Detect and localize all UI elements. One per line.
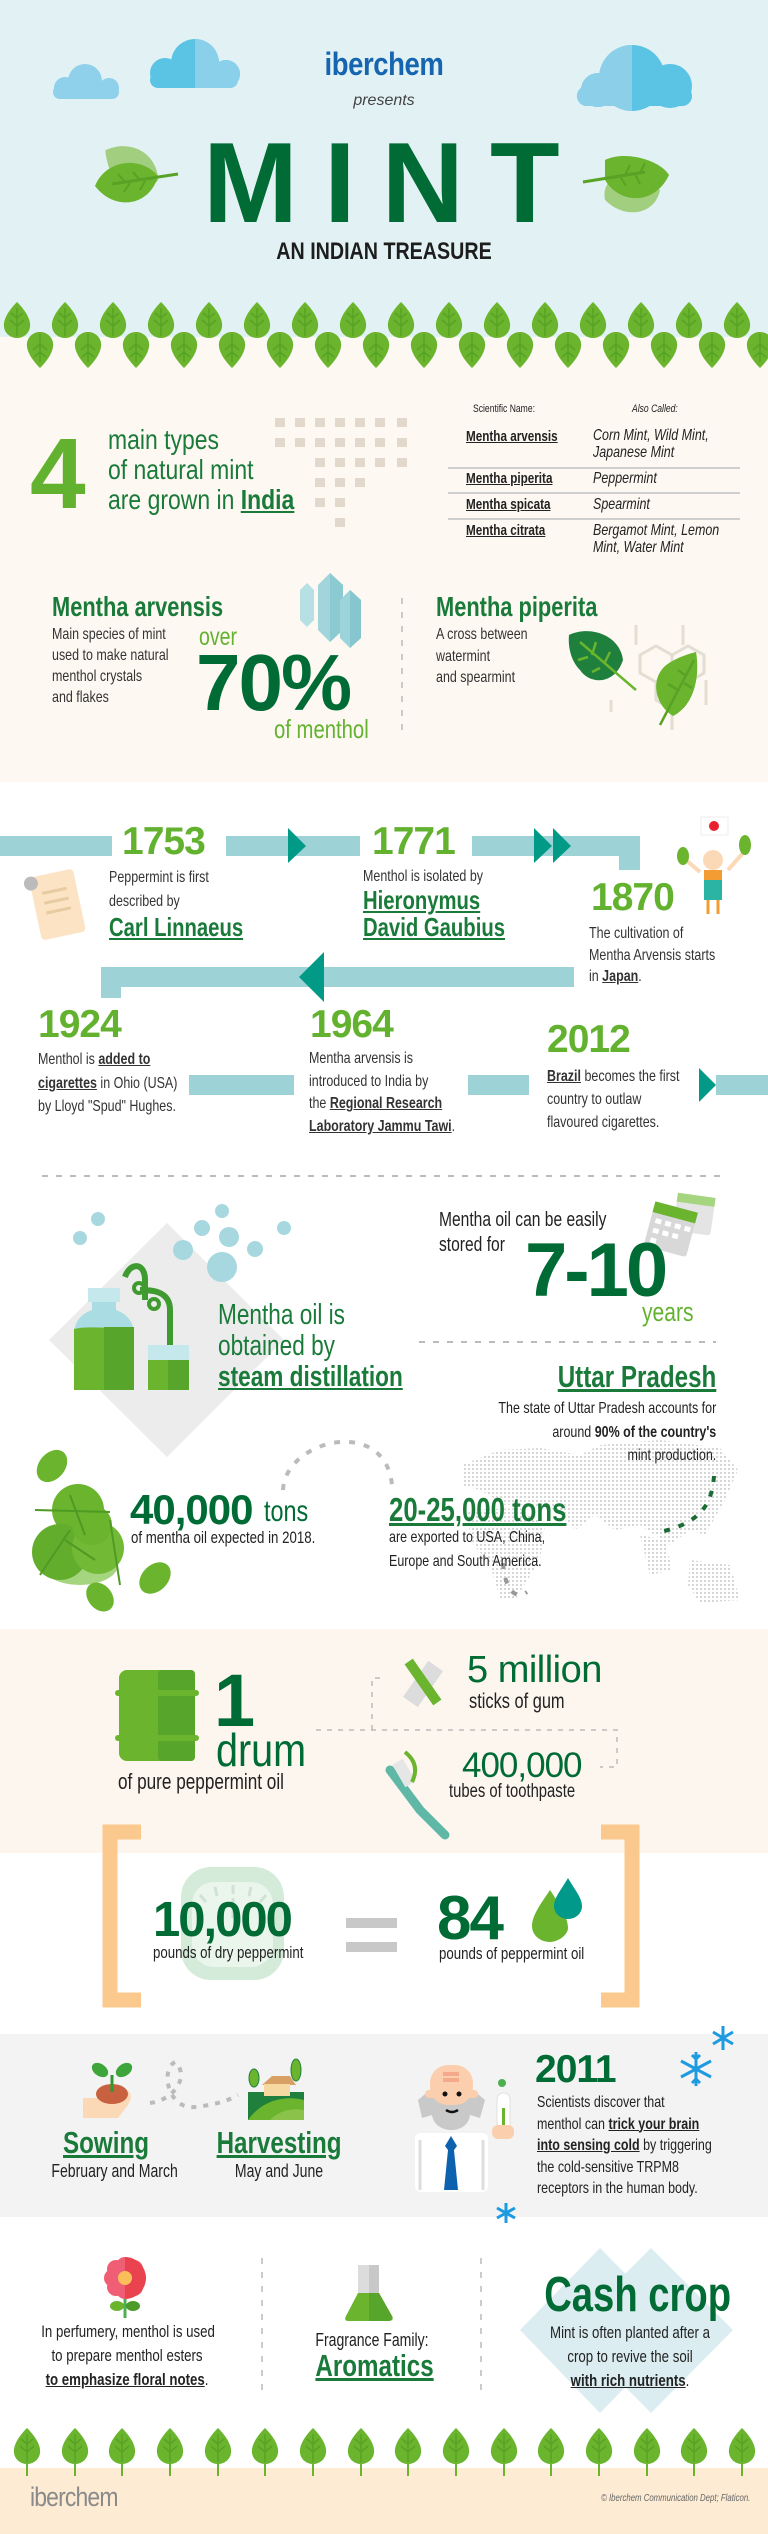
timeline 1753: described by <box>109 893 180 910</box>
timeline 1753: Peppermint is first <box>109 869 209 886</box>
text: fragrance family aromatics: Fragrance Family: <box>315 2330 429 2350</box>
text: main types: main types <box>108 424 219 455</box>
stat: 400,000 tubes: tubes of toothpaste <box>449 1781 575 1802</box>
text: perfumery <box>41 2322 215 2389</box>
icon: seedling in hand <box>83 2060 135 2118</box>
text: steam distillation <box>218 1299 403 1393</box>
timeline 2012: Brazil becomes the first <box>547 1068 679 1085</box>
text: fragrance family aromatics: Aromatics <box>315 2348 434 2383</box>
text: perfumery: In perfumery, menthol is used <box>41 2322 215 2341</box>
text: Uttar Pradesh: The state of Uttar Pradesh accounts for <box>498 1400 716 1417</box>
icon: drum <box>115 1670 199 1761</box>
text: harvesting: May and June <box>235 2161 323 2181</box>
table header: Scientific Name: <box>473 403 535 415</box>
text: steam distillation: obtained by <box>218 1330 335 1362</box>
dotted world map <box>462 1440 740 1603</box>
stat: 10,000 pounds: pounds of dry peppermint <box>153 1943 303 1962</box>
timeline 1964: Mentha arvensis is <box>309 1050 413 1067</box>
timeline: middle bar with left arrow <box>101 952 574 1002</box>
icon: field with house <box>248 2059 304 2120</box>
body <box>436 626 528 686</box>
timeline 1753: Carl Linnaeus <box>109 912 243 942</box>
dividers <box>262 2258 481 2393</box>
stat: 1 drum: drum <box>216 1724 306 1776</box>
stat: 84 pounds: pounds of peppermint oil <box>439 1944 584 1963</box>
table: mint species <box>466 403 719 556</box>
timeline: bottom bar segments <box>189 1068 768 1102</box>
stat: 5 million sticks of gum <box>467 1649 602 1713</box>
text: cash crop <box>544 2268 731 2390</box>
text: cash crop: Cash crop <box>544 2268 731 2322</box>
heading: Mentha arvensis <box>52 591 223 622</box>
body: and spearmint <box>436 669 515 686</box>
logo: iberchem: iberchem <box>325 46 443 82</box>
text: 2011 discovery: 2011 <box>535 2048 616 2091</box>
body: used to make natural <box>52 647 169 664</box>
cloud right <box>577 45 692 111</box>
icons: snowflakes <box>497 2026 733 2223</box>
stat: 1 drum <box>118 1659 306 1794</box>
text: 2011 discovery: receptors in the human body. <box>537 2180 698 2197</box>
stat: 20-25,000 tons exported: are exported to USA, China, <box>389 1529 545 1546</box>
equals sign <box>346 1918 397 1952</box>
footer credit: © Iberchem Communication Dept; Flaticon. <box>601 2493 750 2504</box>
timeline 2012: flavoured cigarettes. <box>547 1114 659 1131</box>
text: main types <box>108 424 294 515</box>
leaf row bottom <box>14 2428 755 2464</box>
icon: scroll <box>23 868 86 942</box>
timeline 1870: in Japan. <box>589 968 642 985</box>
timeline 1924 <box>38 1003 177 1115</box>
timeline 1964: Laboratory Jammu Tawi. <box>309 1118 455 1135</box>
dashed route on map <box>660 1476 714 1532</box>
stat: 20-25,000 tons exported <box>389 1491 566 1570</box>
dashed line right <box>419 1341 716 1343</box>
big number 4: 4 <box>30 418 86 530</box>
text: sowing: Sowing <box>63 2125 149 2160</box>
icon: calendars <box>644 1193 716 1257</box>
text: perfumery: to emphasize floral notes. <box>46 2370 208 2389</box>
subtitle: AN INDIAN TREASURE <box>276 238 492 265</box>
icon: bubbles <box>73 1204 291 1282</box>
timeline 1924: cigarettes in Ohio (USA) <box>38 1074 177 1092</box>
timeline 1964: introduced to India by <box>309 1073 428 1090</box>
timeline 1753 <box>109 820 244 942</box>
icon: flask <box>345 2265 393 2321</box>
body: Main species of mint <box>52 626 166 643</box>
timeline 1771: David Gaubius <box>363 912 505 942</box>
table: mint species: Peppermint <box>593 470 657 487</box>
stat: 40,000 tons: of mentha oil expected in 2018. <box>131 1528 315 1547</box>
text: cash crop: with rich nutrients. <box>571 2371 689 2390</box>
cream band <box>0 1629 768 1853</box>
icon: flower <box>104 2257 146 2318</box>
body <box>52 626 169 706</box>
timeline 1753: 1753 <box>122 820 205 863</box>
footer logo: iberchem <box>30 2482 118 2512</box>
icon: leaves left of title <box>95 139 178 202</box>
dashed line <box>42 1175 723 1177</box>
text: main types: are grown in India <box>108 484 294 515</box>
text: Uttar Pradesh: mint production. <box>627 1447 716 1464</box>
icon: leaves right of title <box>583 156 669 212</box>
timeline 1964 <box>309 1003 455 1135</box>
text: Uttar Pradesh <box>498 1359 716 1464</box>
timeline 1964: 1964 <box>310 1003 393 1046</box>
text: 2011 discovery <box>535 2048 712 2197</box>
timeline 2012: 2012 <box>547 1018 630 1061</box>
stat: 1 drum: 1 <box>214 1659 255 1742</box>
text: stored 7-10 years <box>439 1209 694 1327</box>
stat: 20-25,000 tons exported: 20-25,000 tons <box>389 1491 566 1528</box>
body: and flakes <box>52 689 109 706</box>
text: fragrance family aromatics <box>315 2330 434 2383</box>
icon: person with japan flag <box>677 817 751 914</box>
stat: 84 pounds <box>437 1884 584 1963</box>
timeline 1870: The cultivation of <box>589 925 683 942</box>
timeline 1870 <box>589 876 715 985</box>
timeline 1924: 1924 <box>38 1003 121 1046</box>
text: main types: of natural mint <box>108 454 253 485</box>
dashed connectors <box>316 1678 617 1767</box>
table: mint species: Japanese Mint <box>593 444 674 461</box>
70%: 70% <box>196 638 350 727</box>
leaf row top <box>4 302 768 368</box>
timeline 2012 <box>547 1018 680 1131</box>
panel: Mentha arvensis <box>52 591 369 744</box>
table: mint species: Mentha citrata <box>466 522 545 539</box>
table: mint species: Also Called: <box>632 403 678 415</box>
of menthol: of menthol <box>274 714 369 744</box>
over: over <box>199 623 237 651</box>
text: 2011 discovery: Scientists discover that <box>537 2094 665 2111</box>
timeline 1870: 1870 <box>591 876 674 919</box>
dot grid decoration <box>275 418 407 527</box>
text: stored 7-10 years: Mentha oil can be easily <box>439 1209 606 1231</box>
stat: 400,000 tubes <box>449 1746 582 1802</box>
stat: 5 million sticks of gum: 5 million <box>467 1649 602 1691</box>
dashed loop <box>150 2062 238 2107</box>
text: cash crop: Mint is often planted after a <box>550 2323 710 2342</box>
text: stored 7-10 years: years <box>642 1297 694 1327</box>
icon: oil drops <box>532 1878 582 1942</box>
text: stored 7-10 years: stored for <box>439 1234 505 1256</box>
timeline 2012: country to outlaw <box>547 1091 641 1108</box>
table lines <box>448 468 740 519</box>
brackets <box>110 1832 632 2000</box>
panel: Mentha piperita <box>436 591 598 686</box>
icon: spinach pile <box>30 1444 177 1617</box>
timeline 1771: 1771 <box>372 820 455 863</box>
text: sowing <box>51 2125 178 2181</box>
text: steam distillation: steam distillation <box>218 1361 403 1393</box>
body: A cross between <box>436 626 528 643</box>
timeline 1771: Menthol is isolated by <box>363 868 483 885</box>
cloud small <box>53 64 119 99</box>
stat: 40,000 tons: tons <box>264 1495 308 1528</box>
stat: 400,000 tubes: 400,000 <box>462 1746 582 1785</box>
text: cash crop: crop to revive the soil <box>567 2347 693 2366</box>
row names: Mentha arvensis <box>466 428 558 445</box>
title: MINT: MINT <box>203 120 586 247</box>
footer band <box>0 2468 768 2534</box>
icon: crystals <box>300 573 361 648</box>
diamond background <box>49 1223 284 1457</box>
table: mint species: Mentha piperita <box>466 470 552 487</box>
text: 2011 discovery: the cold-sensitive TRPM8 <box>537 2158 679 2176</box>
icon: piperita leaves with molecule <box>569 625 706 730</box>
text: 2011 discovery: into sensing cold by triggering <box>537 2137 712 2154</box>
table: mint species: Bergamot Mint, Lemon <box>593 522 719 539</box>
sky background <box>0 0 768 337</box>
dashed arc <box>283 1442 392 1490</box>
cloud middle <box>150 39 240 88</box>
gray band <box>0 2034 768 2217</box>
stat: 10,000 pounds: 10,000 <box>153 1893 291 1947</box>
text: stored 7-10 years: 7-10 <box>525 1228 665 1313</box>
text: sowing: February and March <box>51 2161 178 2181</box>
table: mint species: Spearmint <box>593 496 650 513</box>
heading: Mentha piperita <box>436 591 597 622</box>
cream panel background <box>0 337 768 782</box>
icon: faded scale <box>181 1867 284 1980</box>
stat: 1 drum: of pure peppermint oil <box>118 1769 284 1794</box>
text: 2011 discovery: menthol can trick your brain <box>537 2116 699 2132</box>
table: mint species: Corn Mint, Wild Mint, <box>593 427 709 444</box>
icon: scientist <box>415 2065 514 2192</box>
timeline 1771: Hieronymus <box>363 885 480 915</box>
stat: 40,000 tons: 40,000 <box>130 1486 252 1533</box>
stat: 5 million sticks of gum: sticks of gum <box>469 1690 565 1713</box>
timeline 1924: by Lloyd "Spud" Hughes. <box>38 1098 176 1115</box>
timeline: top bar with arrows <box>0 828 640 870</box>
stat: 20-25,000 tons exported: Europe and South America. <box>389 1553 542 1570</box>
table: mint species: Mint, Water Mint <box>593 539 684 556</box>
timeline 1870: Mentha Arvensis starts <box>589 946 715 964</box>
icon: distillation bottles <box>74 1266 189 1390</box>
text: Uttar Pradesh: Uttar Pradesh <box>557 1359 716 1394</box>
text: perfumery: to prepare menthol esters <box>51 2346 203 2365</box>
text: steam distillation: Mentha oil is <box>218 1299 345 1331</box>
timeline 1964: the Regional Research <box>309 1095 442 1112</box>
text: harvesting <box>216 2125 342 2181</box>
divider <box>401 598 403 735</box>
table: mint species: Mentha spicata <box>466 496 551 513</box>
text: harvesting: Harvesting <box>217 2125 342 2160</box>
icon: toothbrush <box>390 1752 445 1835</box>
stat: 84 pounds: 84 <box>437 1884 502 1953</box>
body: menthol crystals <box>52 668 142 685</box>
stat: 4 main types <box>30 418 294 530</box>
text: Uttar Pradesh: around 90% of the country's <box>552 1424 716 1440</box>
presents: presents <box>353 92 415 109</box>
timeline 1924: Menthol is added to <box>38 1051 150 1068</box>
cash crop diamonds <box>520 2248 733 2413</box>
body: watermint <box>436 648 490 664</box>
timeline 1771 <box>363 820 505 942</box>
icon: gum <box>403 1659 443 1707</box>
stat: 40,000 tons <box>130 1486 315 1547</box>
